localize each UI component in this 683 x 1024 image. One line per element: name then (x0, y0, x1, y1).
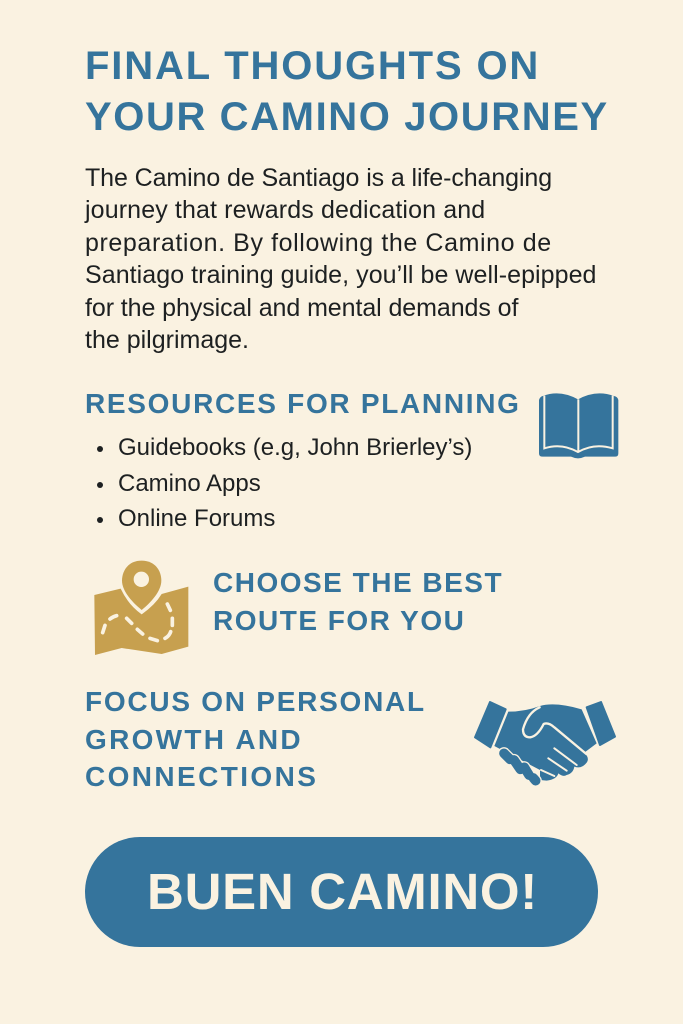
heading: focus on personal growth (85, 686, 426, 792)
icon: map with pin (94, 560, 188, 655)
resource list (97, 434, 472, 532)
heading: focus on personal growth: GROWTH AND (85, 724, 303, 754)
intro text block: for the physical and mental demands of (85, 294, 518, 322)
intro text block: The Camino de Santiago is a life-changing (85, 164, 552, 192)
call to action button (85, 837, 598, 947)
intro text block: preparation. By following the Camino de (85, 229, 552, 257)
heading: focus on personal growth: CONNECTIONS (85, 761, 318, 792)
intro text block (84, 164, 596, 354)
resource list: Guidebooks (e.g, John Brierley’s) (118, 434, 472, 461)
title: FINAL THOUGHTS ON (85, 44, 540, 88)
heading: focus on personal growth: FOCUS ON PERSONAL (85, 686, 426, 717)
heading: choose the best route (213, 567, 503, 636)
intro text block: journey that rewards dedication and (85, 196, 485, 224)
heading: resources for planning: RESOURCES FOR PLANNING (85, 388, 521, 419)
intro text block: the pilgrimage. (85, 326, 249, 354)
icon: handshake (474, 701, 616, 786)
call to action button: BUEN CAMINO! (147, 863, 538, 920)
title: YOUR CAMINO JOURNEY (85, 95, 609, 139)
heading: choose the best route: ROUTE FOR YOU (213, 604, 465, 636)
resource list: Camino Apps (118, 470, 261, 496)
title (85, 44, 609, 139)
intro text block: Santiago training guide, you’ll be well-epipped (85, 261, 596, 289)
heading: choose the best route: CHOOSE THE BEST (213, 567, 503, 598)
icon: open book (539, 393, 618, 458)
resource list: Online Forums (118, 505, 275, 532)
